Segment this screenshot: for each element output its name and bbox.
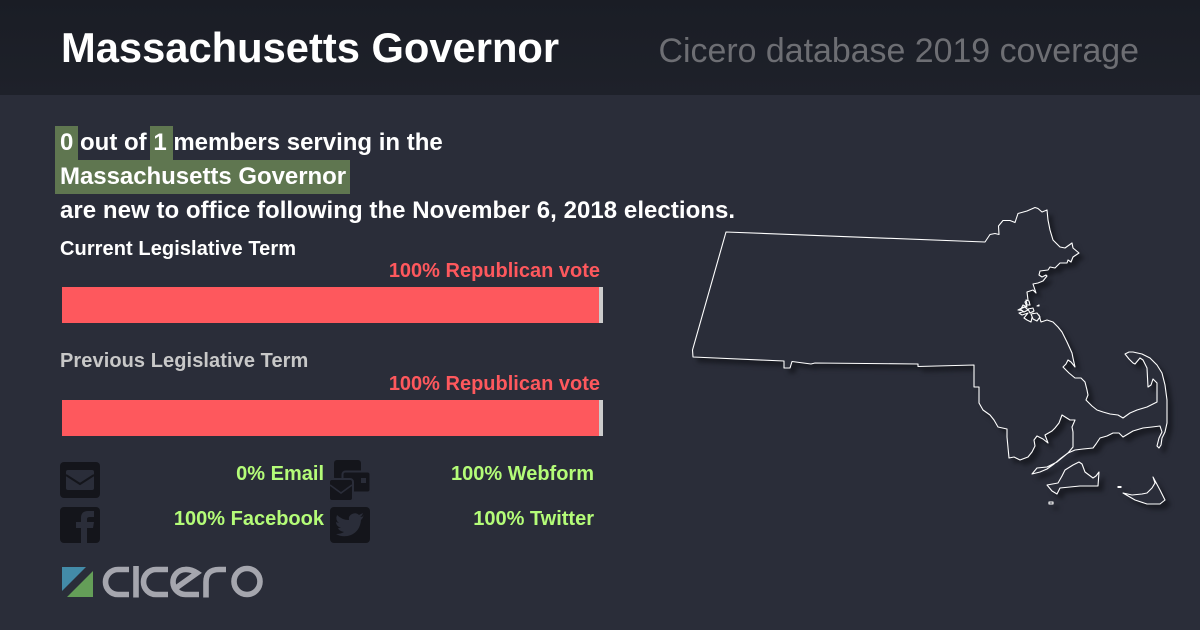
previous vote label: 100% Republican vote — [389, 373, 600, 395]
facebook stat: 100% Facebook — [174, 508, 324, 530]
subtitle: Cicero database 2019 coverage — [659, 32, 1139, 70]
icon: twitter — [330, 507, 370, 543]
summary text — [55, 126, 735, 224]
webform stat: 100% Webform — [451, 463, 594, 485]
logo wordmark — [106, 566, 260, 598]
logo mark — [62, 567, 93, 597]
icon: email — [60, 462, 100, 498]
title: Massachusetts Governor — [61, 24, 559, 71]
header band — [0, 0, 1200, 95]
map: Nantucket — [1123, 477, 1165, 504]
current term bar — [62, 287, 603, 323]
map: mainland and Cape Cod — [692, 208, 1167, 474]
highlight: 0 — [55, 126, 78, 160]
twitter stat: 100% Twitter — [473, 508, 594, 530]
icon: webform — [330, 460, 370, 500]
previous term label: Previous Legislative Term — [60, 350, 308, 372]
previous term bar — [62, 400, 603, 436]
icon: facebook — [60, 507, 100, 543]
current term label: Current Legislative Term — [60, 238, 296, 260]
line 3: are new to office following the November 6, 2018 elections. — [60, 197, 735, 224]
highlight: body name — [55, 160, 350, 194]
line 1: 0 out of 1 members serving in the — [60, 129, 443, 156]
map: small islands and harbor detail — [1020, 300, 1121, 504]
highlight: 1 — [150, 126, 173, 160]
email stat: 0% Email — [236, 463, 324, 485]
logo: cicero — [62, 566, 263, 598]
line 2: Massachusetts Governor — [60, 163, 346, 190]
current vote label: 100% Republican vote — [389, 260, 600, 282]
map: Martha's Vineyard — [1047, 462, 1099, 494]
